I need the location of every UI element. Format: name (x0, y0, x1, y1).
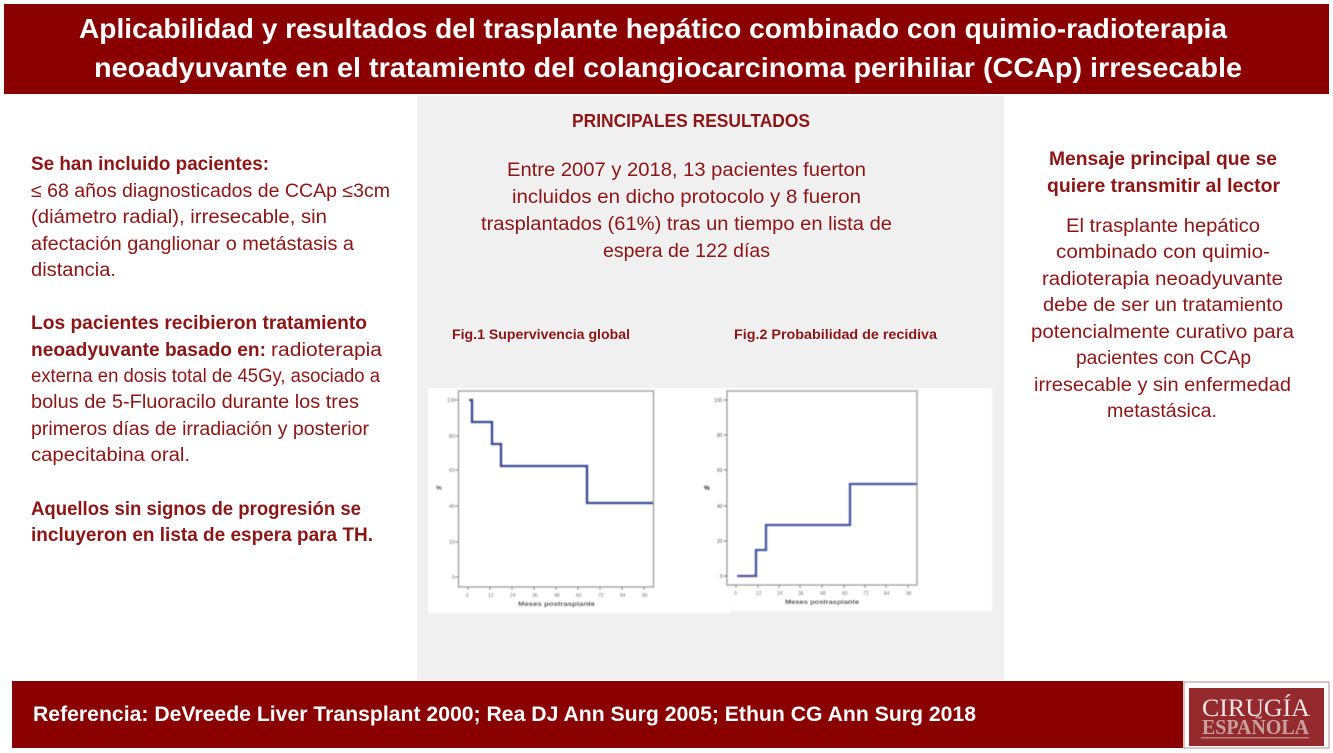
chart: probabilidad de recidiva (704, 388, 992, 611)
text block: results summary (481, 160, 892, 262)
chart: supervivencia global: 0 (452, 575, 455, 581)
chart: supervivencia global: 48 (554, 593, 560, 599)
heading: mensaje principal: Mensaje principal que se (1049, 149, 1277, 170)
chart: supervivencia global: 12 (488, 593, 494, 599)
text block: main message (1031, 216, 1294, 422)
chart: probabilidad de recidiva: 20 (717, 539, 723, 545)
text block: results summary: trasplantados (61%) tras un tiempo en lista de (481, 214, 892, 235)
panel: inclusion and treatment text: (diámetro radial), irresecable, sin (31, 207, 327, 228)
chart: probabilidad de recidiva: 0 (720, 574, 723, 580)
panel: inclusion and treatment text: neoadyuvante basado en: (31, 340, 266, 361)
panel: inclusion and treatment text: ≤ 68 años diagnosticados de CCAp ≤3cm (31, 181, 390, 202)
text block: main message: metastásica. (1107, 401, 1217, 422)
chart: supervivencia global: Meses postrasplante (518, 601, 595, 608)
text block: main message: irresecable y sin enfermedad (1034, 375, 1291, 396)
panel: inclusion and treatment text: primeros días de irradiación y posterior (31, 419, 370, 440)
chart: probabilidad de recidiva: 84 (884, 591, 890, 597)
panel: inclusion and treatment text: Los pacientes recibieron tratamiento (31, 313, 367, 334)
panel: inclusion and treatment text: afectación ganglionar o metástasis a (31, 234, 354, 255)
title (79, 13, 1242, 83)
text block: results summary: incluidos en dicho protocolo y 8 fueron (512, 187, 861, 208)
text block: results summary: espera de 122 días (603, 241, 770, 262)
chart: probabilidad de recidiva: 36 (798, 591, 804, 597)
chart: probabilidad de recidiva: 24 (777, 591, 783, 597)
chart: supervivencia global: 72 (598, 593, 604, 599)
text block: main message: El trasplante hepático (1066, 216, 1260, 237)
chart: supervivencia global: 0 (466, 593, 469, 599)
footer banner (12, 681, 1183, 748)
chart: supervivencia global: 36 (532, 593, 538, 599)
title: Aplicabilidad y resultados del trasplante hepático combinado con quimio-radioterapia (79, 13, 1227, 44)
panel: principales resultados (417, 96, 1004, 680)
chart: supervivencia global: 20 (449, 540, 455, 546)
chart: probabilidad de recidiva: 80 (717, 433, 723, 439)
chart: probabilidad de recidiva: 40 (717, 504, 723, 510)
chart: supervivencia global: 96 (642, 593, 648, 599)
heading: figure 2: Fig.2 Probabilidad de recidiva (734, 327, 938, 342)
heading: principales resultados: PRINCIPALES RESULTADOS (572, 111, 810, 131)
logo: Cirugía Española (1184, 682, 1329, 748)
chart: probabilidad de recidiva: % (704, 485, 710, 492)
chart: probabilidad de recidiva: 100 (714, 398, 723, 404)
logo: Cirugía Española: CIRUGÍA (1202, 694, 1310, 722)
heading: mensaje principal: quiere transmitir al lector (1047, 176, 1281, 197)
reference text: Referencia: DeVreede Liver Transplant 2000; Rea DJ Ann Surg 2005; Ethun CG Ann Surg 2018 (33, 703, 976, 726)
text block: main message: combinado con quimio- (1056, 242, 1270, 263)
chart: supervivencia global: 60 (449, 468, 455, 474)
panel: mensaje principal (1031, 149, 1294, 422)
panel: inclusion and treatment text: Aquellos sin signos de progresión se (31, 499, 361, 520)
panel: inclusion and treatment text: radioterapia (271, 340, 382, 361)
text block: results summary: Entre 2007 y 2018, 13 pacientes fuerton (507, 160, 866, 181)
chart: probabilidad de recidiva: 12 (756, 591, 762, 597)
text block: main message: radioterapia neoadyuvante (1042, 269, 1283, 290)
chart: supervivencia global: 60 (576, 593, 582, 599)
panel: inclusion and treatment text: bolus de 5-Fluoracilo durante los tres (31, 392, 359, 413)
panel: inclusion and treatment text: incluyeron en lista de espera para TH. (31, 525, 373, 546)
chart: supervivencia global: 84 (620, 593, 626, 599)
text block: main message: potencialmente curativo para (1031, 322, 1294, 343)
chart: probabilidad de recidiva: Meses postrasplante (785, 599, 859, 606)
text block: main message: pacientes con CCAp (1076, 348, 1251, 369)
chart: probabilidad de recidiva: 48 (820, 591, 826, 597)
text block: main message: debe de ser un tratamiento (1043, 295, 1283, 316)
chart: supervivencia global (428, 388, 730, 613)
chart: probabilidad de recidiva: 60 (717, 468, 723, 474)
panel: inclusion and treatment text: externa en dosis total de 45Gy, asociado a (31, 366, 380, 387)
chart: supervivencia global: 24 (510, 593, 516, 599)
panel: inclusion and treatment text (31, 154, 390, 546)
title: neoadyuvante en el tratamiento del colangiocarcinoma perihiliar (CCAp) irresecable (94, 52, 1242, 83)
chart: supervivencia global: 40 (449, 504, 455, 510)
logo: Cirugía Española: ESPAÑOLA (1202, 715, 1310, 739)
panel: inclusion and treatment text: distancia. (31, 260, 116, 281)
panel: inclusion and treatment text: Se han incluido pacientes: (31, 154, 269, 175)
heading: mensaje principal (1047, 149, 1281, 197)
chart: probabilidad de recidiva: 0 (734, 591, 737, 597)
chart: probabilidad de recidiva: 96 (906, 591, 912, 597)
chart: probabilidad de recidiva: 60 (842, 591, 848, 597)
title banner (4, 4, 1329, 94)
chart: supervivencia global: % (436, 485, 442, 492)
chart: probabilidad de recidiva: 72 (863, 591, 869, 597)
chart: supervivencia global: 80 (449, 434, 455, 440)
panel: inclusion and treatment text: capecitabina oral. (31, 445, 190, 466)
heading: figure 1: Fig.1 Supervivencia global (452, 327, 630, 342)
chart: supervivencia global: 100 (447, 398, 456, 404)
